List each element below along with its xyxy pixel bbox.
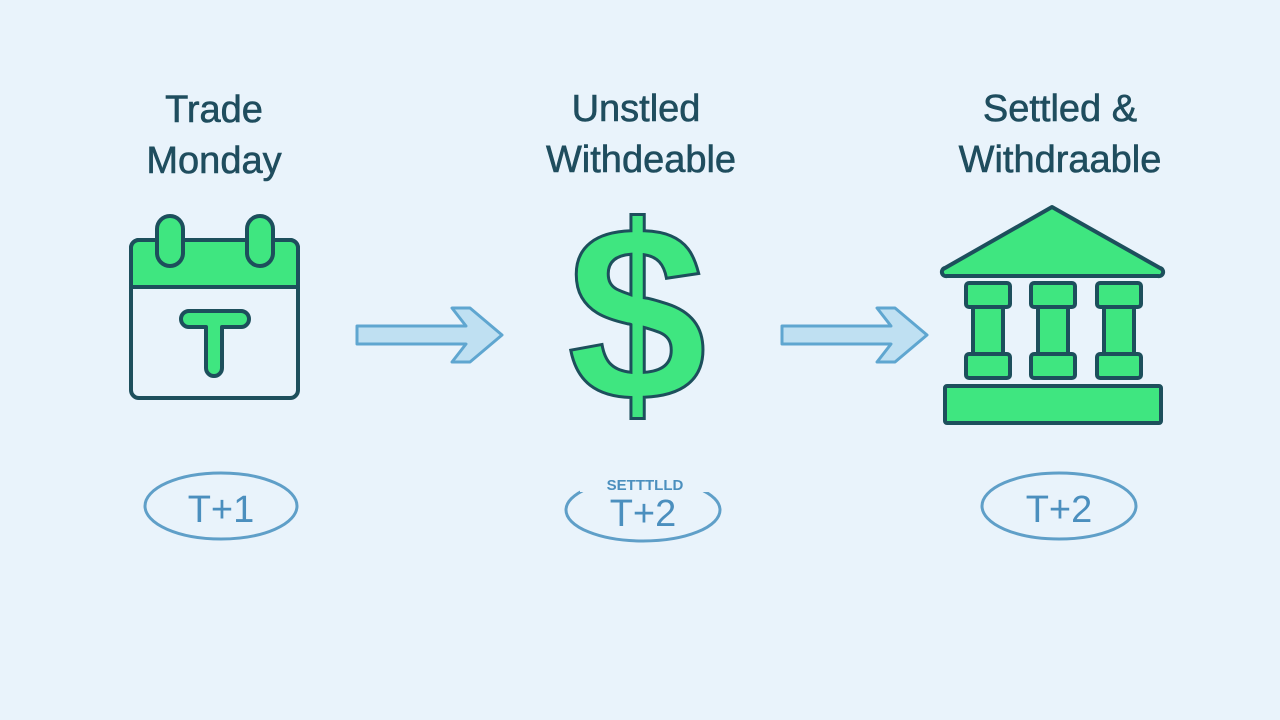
- badge: T+1: [145, 473, 297, 539]
- heading: unsettled: Withdeable: [546, 139, 736, 181]
- badge: T+1: T+1: [188, 489, 254, 531]
- arrow 1: [357, 308, 502, 362]
- heading: unsettled: [546, 88, 736, 181]
- badge: T+2 middle: SETTTLLD: [607, 477, 683, 494]
- heading: settled: Withdraable: [959, 139, 1161, 181]
- icon: bank: [942, 207, 1163, 423]
- arrow 2: [782, 308, 927, 362]
- heading: settled: Settled &: [983, 88, 1137, 130]
- badge: T+2 middle: [566, 472, 720, 541]
- badge: T+2 right: T+2: [1026, 489, 1092, 531]
- heading: trade monday: [146, 89, 282, 182]
- badge: T+2 right: [982, 473, 1136, 539]
- heading: settled: [959, 88, 1161, 181]
- badge: T+2 middle: T+2: [610, 493, 676, 535]
- icon: dollar: $: [567, 174, 707, 453]
- heading: trade monday: Monday: [146, 140, 282, 182]
- heading: trade monday: Trade: [165, 89, 263, 131]
- heading: unsettled: Unstled: [572, 88, 700, 130]
- icon: calendar: [131, 216, 298, 398]
